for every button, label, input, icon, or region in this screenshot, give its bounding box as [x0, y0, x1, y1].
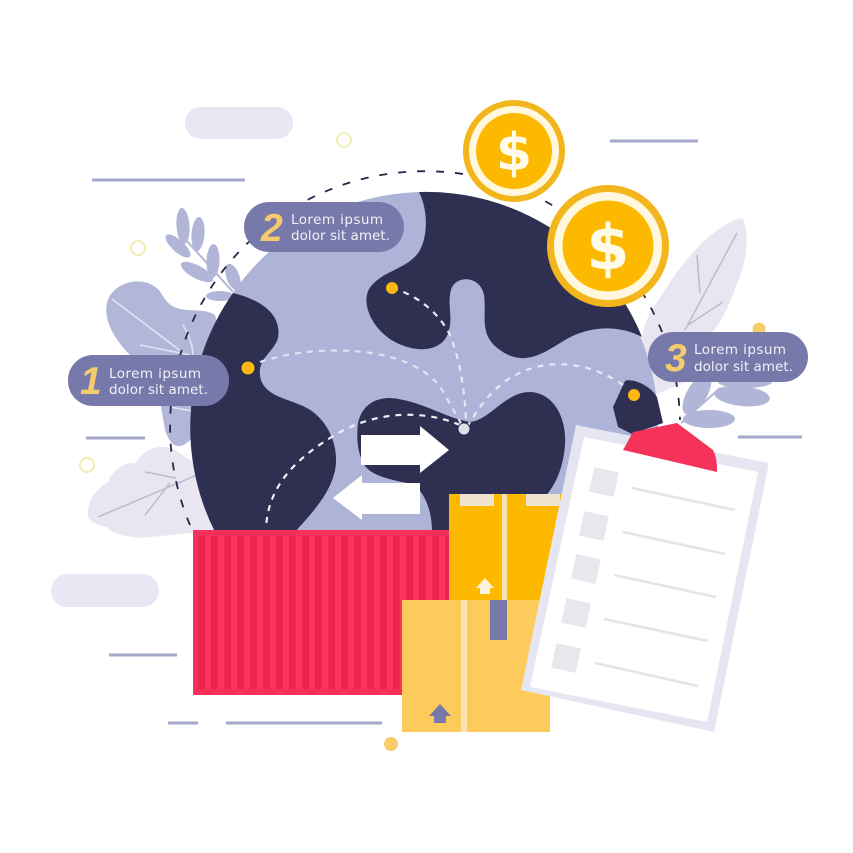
leaf sprig: lower right: [677, 369, 772, 428]
continent: island right: [613, 380, 663, 434]
coin bottom: [547, 185, 669, 307]
decorative small circles: [80, 133, 351, 472]
leaf sprig: top left: [162, 208, 244, 301]
coin top: $: [496, 123, 532, 183]
route hub: [458, 423, 470, 435]
continent: top: [366, 192, 642, 358]
label 1: Lorem ipsum: [109, 366, 201, 382]
continent: left: [190, 293, 336, 532]
box back: [449, 494, 564, 600]
label 2: Lorem ipsum: [291, 212, 383, 228]
leaf: pale lower left: [88, 447, 225, 538]
leaf: pale upper right: [643, 218, 747, 395]
label 3: 3: [665, 337, 687, 380]
globe: [190, 192, 663, 658]
leaf: large blue left: [106, 281, 235, 446]
coin top: [463, 100, 565, 202]
yellow dot bottom: [384, 737, 398, 751]
checklist boxes: [551, 467, 619, 673]
clipboard paper: [530, 437, 758, 722]
label 2: 2: [260, 207, 283, 250]
pin 1: [242, 362, 254, 374]
dashed orbit ring: [170, 171, 680, 525]
label 2: [244, 202, 404, 252]
clipboard: [521, 423, 769, 732]
decorative lines: [86, 141, 802, 723]
checklist lines: [595, 488, 735, 686]
clipboard board: [521, 425, 769, 732]
label 1: [68, 355, 229, 406]
globe ocean: [192, 192, 658, 658]
label 1: 1: [80, 360, 102, 403]
label 3: dolor sit amet.: [694, 359, 793, 375]
label 3: Lorem ipsum: [694, 342, 786, 358]
pin 3: [628, 389, 640, 401]
label 1: dolor sit amet.: [109, 382, 208, 398]
arrow left: [333, 475, 420, 520]
decorative cloud pill bottom: [51, 574, 159, 607]
yellow dot behind label 3: [752, 322, 766, 336]
label 3: [648, 332, 808, 382]
box front: [402, 600, 550, 732]
decorative cloud pill top: [185, 107, 293, 139]
coin bottom: $: [586, 211, 630, 284]
shipping container: [193, 530, 450, 695]
clipboard clip: [623, 423, 717, 472]
label 2: dolor sit amet.: [291, 228, 390, 244]
continent: centre: [357, 392, 565, 532]
shipping routes: [260, 288, 623, 528]
arrow right: [361, 426, 449, 473]
pin 2: [386, 282, 398, 294]
